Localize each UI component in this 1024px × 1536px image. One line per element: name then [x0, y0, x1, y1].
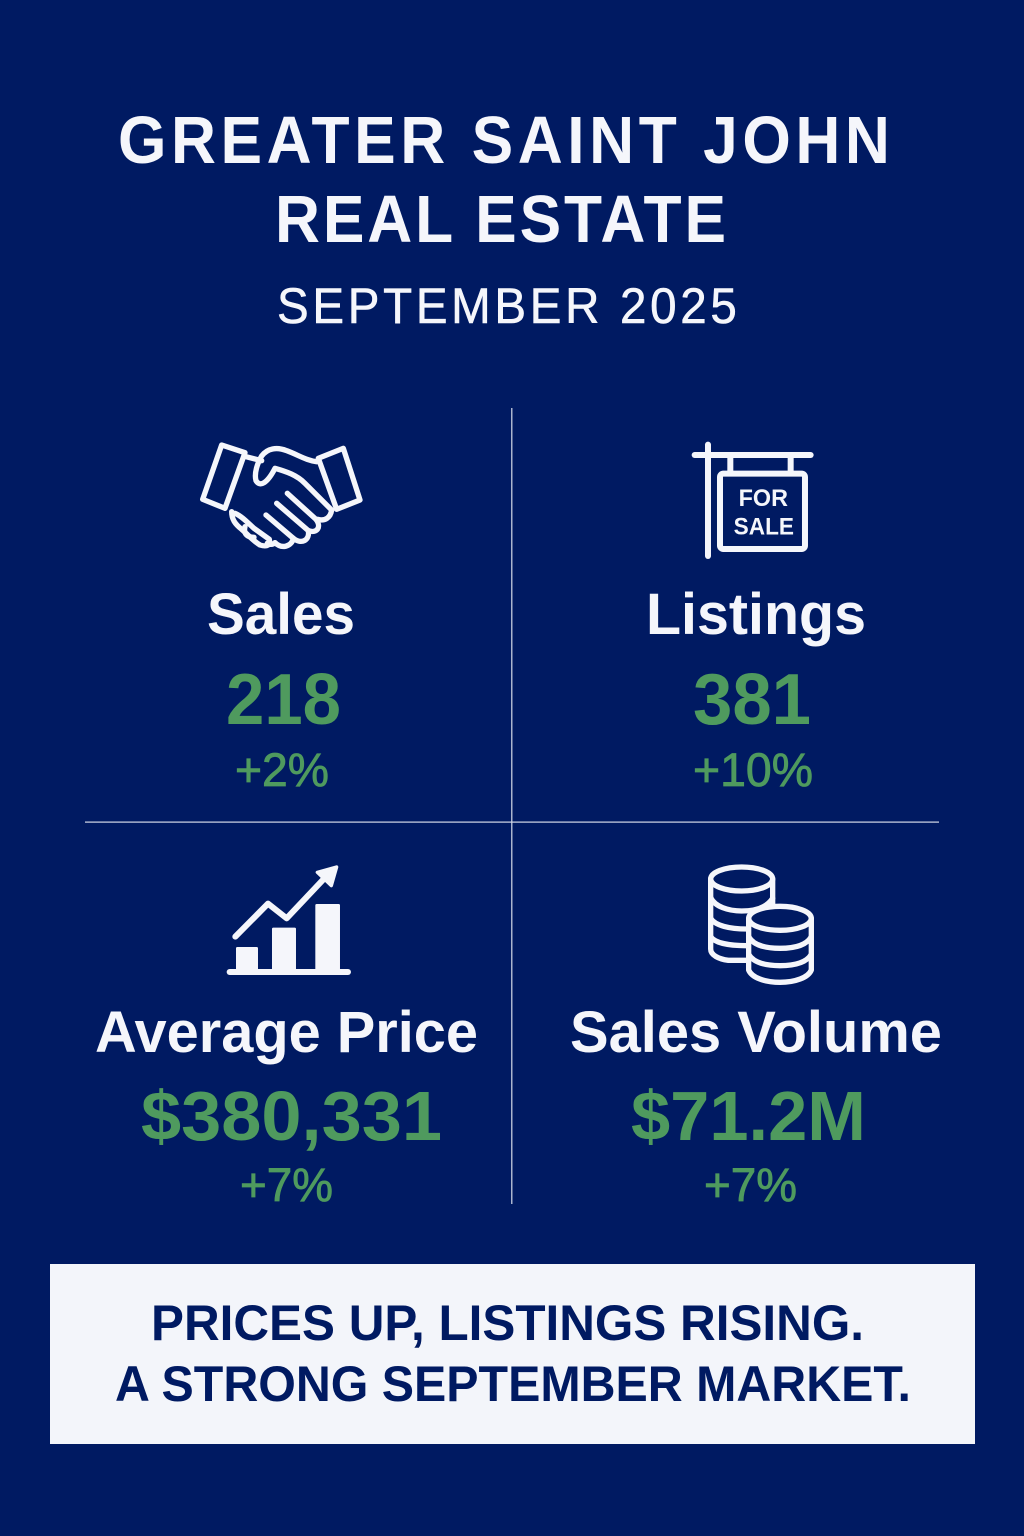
- icon: for sale sign: FOR: [739, 485, 788, 512]
- value: average price: $380,331: [141, 1077, 442, 1155]
- label: sales volume: Sales Volume: [570, 1000, 942, 1065]
- panel: sales: [203, 445, 360, 796]
- panel: sales volume: [570, 867, 942, 1211]
- title: REAL ESTATE: [275, 181, 726, 256]
- callout banner: [50, 1264, 975, 1444]
- panel: average price: [95, 867, 478, 1211]
- title: GREATER SAINT JOHN: [118, 102, 890, 177]
- icon: handshake: [203, 445, 360, 546]
- icon: for sale sign: [695, 445, 811, 556]
- callout banner: PRICES UP, LISTINGS RISING.: [151, 1295, 864, 1351]
- title: [118, 102, 890, 256]
- change: average price: +7%: [240, 1158, 333, 1211]
- label: listings: Listings: [646, 582, 866, 647]
- label: sales: Sales: [207, 582, 355, 647]
- icon: rising bar chart: [227, 867, 351, 975]
- value: sales: 218: [226, 660, 341, 740]
- value: listings: 381: [693, 660, 811, 740]
- value: sales volume: $71.2M: [631, 1077, 866, 1155]
- panel: listings: [646, 445, 866, 796]
- icon: coin stacks: [711, 867, 811, 982]
- change: sales: +2%: [235, 743, 329, 796]
- callout banner: A STRONG SEPTEMBER MARKET.: [115, 1356, 911, 1412]
- icon: for sale sign: SALE: [734, 513, 794, 540]
- change: listings: +10%: [693, 743, 813, 796]
- label: average price: Average Price: [95, 1000, 478, 1065]
- change: sales volume: +7%: [704, 1158, 797, 1211]
- subtitle: date: SEPTEMBER 2025: [277, 279, 737, 334]
